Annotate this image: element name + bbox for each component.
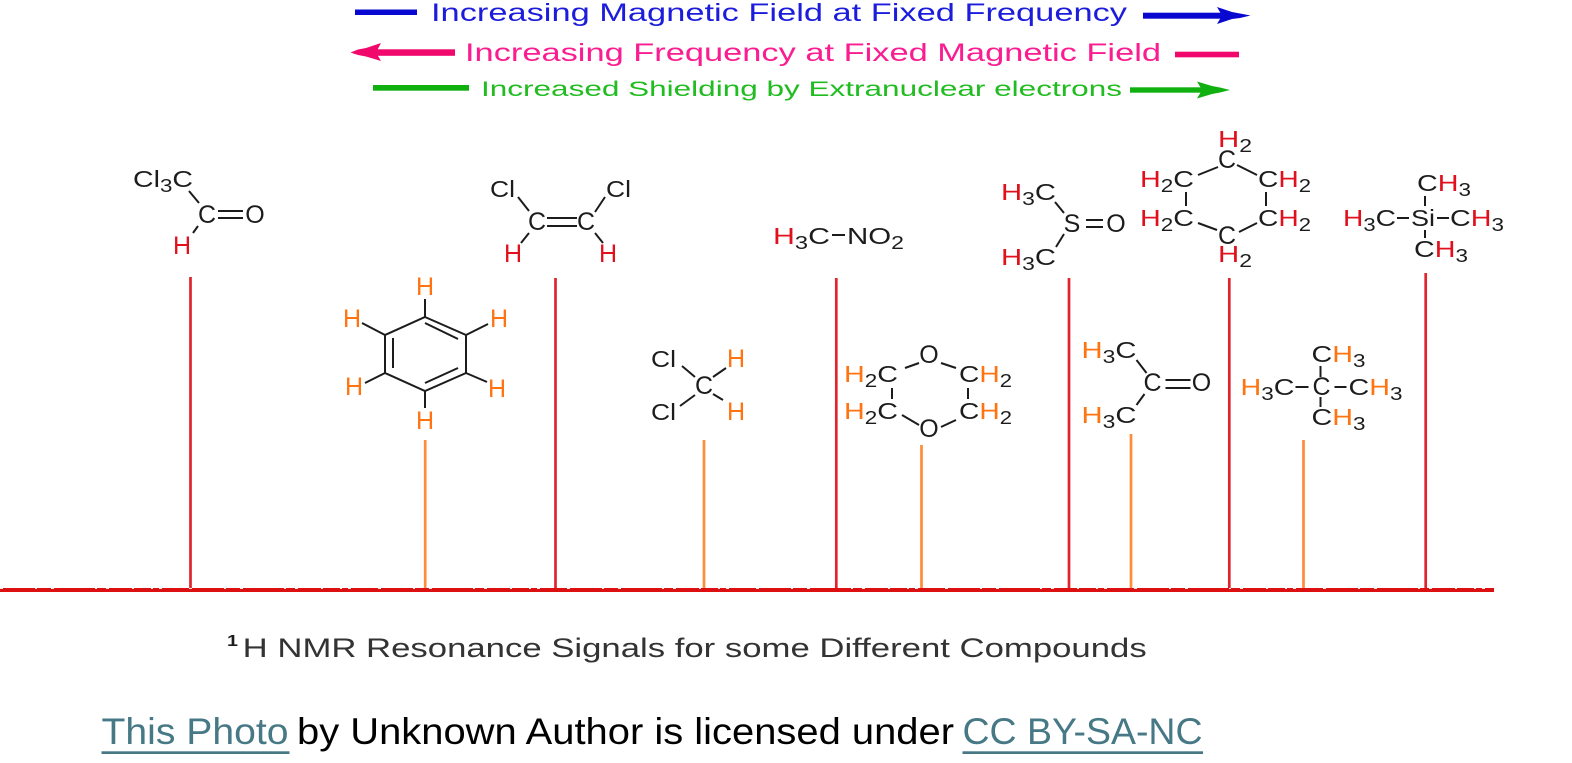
molecule: dimethyl sulfoxide: C [1035,244,1056,270]
molecule: tert-butyl compound: 3 [1353,414,1366,434]
molecule: cyclohexane: 2 [1161,176,1173,196]
molecule: 1,4-dioxane: O [919,415,939,443]
molecule: tert-butyl compound: C [1312,373,1331,401]
molecule: trichloroacetaldehyde: C [198,201,216,229]
molecule: cyclohexane: C [1173,166,1194,192]
molecule: 1,4-dioxane: 2 [865,371,877,391]
molecule: trichloroacetaldehyde: C [172,166,193,192]
molecule: benzene: H [490,305,508,333]
molecule: cyclohexane: 2 [1239,136,1252,156]
molecule: dichloromethane: C [695,372,713,400]
molecule: dimethyl sulfoxide: C [1035,179,1056,205]
molecule: dichloromethane: Cl [651,346,676,372]
molecule: tetramethylsilane: 3 [1491,215,1504,235]
molecule: tert-butyl compound: CH [1312,341,1349,367]
molecule: dimethyl sulfoxide [1001,179,1126,274]
molecule: trichloroacetaldehyde: H [173,232,191,260]
molecule: tetramethylsilane: Si [1411,205,1435,231]
molecule: acetone: C [1115,337,1136,363]
molecule: dimethyl sulfoxide: S [1064,210,1080,238]
attribution line [102,711,1203,754]
molecule: 1,2-dichloroethene: C [528,208,546,236]
molecule: dichloromethane: H [727,345,745,373]
molecule: cyclohexane: C [1173,205,1194,231]
molecule: dimethyl sulfoxide: H [1001,179,1022,205]
molecule: benzene: H [488,375,506,403]
molecule: acetone: 3 [1103,347,1115,367]
molecule: 1,4-dioxane: 2 [1000,408,1012,428]
molecule: 1,4-dioxane: C [877,398,898,424]
molecule: cyclohexane: H [1140,205,1161,231]
molecule: dichloromethane: Cl [651,399,676,425]
molecule: nitromethane: 3 [795,233,808,253]
legend row: increasing magnetic field [355,0,1250,27]
molecule: acetone [1082,337,1211,432]
molecule: tetramethylsilane: C [1376,205,1396,231]
molecule: trichloroacetaldehyde [133,166,265,260]
molecule: tert-butyl compound: CH [1312,404,1349,430]
molecule: cyclohexane: CH [1258,166,1295,192]
molecule: 1,4-dioxane: 2 [1000,371,1012,391]
legend row: increasing frequency: Increasing Frequency at Fixed Magnetic Field [465,39,1161,67]
molecule: cyclohexane: H [1218,241,1239,267]
molecule: dimethyl sulfoxide: O [1106,210,1126,238]
molecule: trichloroacetaldehyde: Cl [133,166,155,192]
molecule: dichloromethane [651,345,745,426]
molecule: nitromethane [773,223,904,253]
molecule: trichloroacetaldehyde: 3 [160,176,172,196]
molecule: cyclohexane: 2 [1299,176,1311,196]
molecule: tert-butyl compound: H [1240,374,1261,400]
molecule: tetramethylsilane: CH [1450,205,1487,231]
molecule: cyclohexane: C [1218,146,1236,174]
legend row: increasing frequency [350,39,1239,67]
molecule: 1,4-dioxane: H [844,361,865,387]
molecule: dimethyl sulfoxide: H [1001,244,1022,270]
molecule: cyclohexane: CH [1258,205,1295,231]
molecule: benzene [343,273,508,435]
molecule: 1,2-dichloroethene: H [599,240,617,268]
signal peaks: orange [425,434,1304,589]
molecule: tert-butyl compound: CH [1348,374,1386,400]
molecule: 1,2-dichloroethene: Cl [606,176,631,202]
molecule: 1,4-dioxane: CH [959,398,996,424]
molecule: cyclohexane: H [1218,126,1239,152]
molecule: acetone: C [1115,402,1136,428]
attribution line: by Unknown Author is licensed under [297,711,954,752]
molecule: dimethyl sulfoxide: 3 [1022,254,1035,274]
signal peaks: red [190,273,1426,590]
spectrum baseline [0,588,1494,592]
molecule: acetone: 3 [1103,412,1115,432]
molecule: benzene: H [343,305,361,333]
attribution line: CC BY-SA-NC [962,711,1202,752]
molecule: acetone: C [1143,369,1162,397]
molecule: acetone: H [1082,337,1103,363]
molecule: nitromethane: NO [847,223,882,249]
molecule: 1,4-dioxane: CH [959,361,996,387]
molecule: tert-butyl compound: C [1274,374,1294,400]
molecule: tetramethylsilane: CH [1417,170,1454,196]
legend: direction arrows [350,0,1250,101]
molecule: tert-butyl compound: 3 [1353,351,1366,371]
molecule: 1,4-dioxane [844,341,1012,443]
spectrum: signal lines and baseline [0,273,1494,592]
molecule: cyclohexane: C [1218,222,1236,250]
molecule: 1,2-dichloroethene: H [504,240,522,268]
molecule: tert-butyl compound: 3 [1390,384,1402,404]
molecule: benzene: H [345,373,363,401]
molecule: dimethyl sulfoxide: 3 [1022,189,1035,209]
molecule: cyclohexane: 2 [1239,251,1252,271]
molecule: tetramethylsilane: CH [1414,236,1451,262]
legend row: increased shielding: Increased Shielding by Extranuclear electrons [481,78,1122,101]
molecule: nitromethane: C [808,223,830,249]
molecule: 1,4-dioxane: 2 [865,408,877,428]
molecule: 1,4-dioxane: O [919,341,939,369]
molecules [133,126,1504,443]
molecule: tetramethylsilane: 3 [1455,246,1468,266]
molecule: 1,4-dioxane: C [877,361,898,387]
molecule: dichloromethane: H [727,398,745,426]
molecule: trichloroacetaldehyde: O [245,201,265,229]
molecule: nitromethane: H [773,223,795,249]
molecule: 1,2-dichloroethene: C [577,208,595,236]
molecule: 1,2-dichloroethene [490,176,631,268]
molecule: benzene: H [416,407,434,435]
molecule: acetone: O [1192,369,1211,397]
attribution line: This Photo [102,711,288,752]
molecule: cyclohexane: 2 [1299,215,1311,235]
molecule: tetramethylsilane: H [1343,205,1363,231]
molecule: tetramethylsilane: 3 [1363,215,1376,235]
caption: chart title: H NMR Resonance Signals for some Different Compounds [243,633,1147,663]
molecule: tert-butyl compound: 3 [1261,384,1274,404]
molecule: acetone: H [1082,402,1103,428]
molecule: tetramethylsilane [1343,170,1504,266]
molecule: tetramethylsilane: 3 [1458,180,1471,200]
molecule: cyclohexane: 2 [1161,215,1173,235]
molecule: nitromethane: 2 [891,233,904,253]
molecule: tert-butyl compound [1240,341,1402,434]
molecule: benzene: H [416,273,434,301]
molecule: cyclohexane [1140,126,1311,271]
caption: chart title: 1 [227,633,238,650]
molecule: 1,4-dioxane: H [844,398,865,424]
legend row: increased shielding [373,78,1230,101]
molecule: cyclohexane: H [1140,166,1161,192]
molecule: 1,2-dichloroethene: Cl [490,176,515,202]
